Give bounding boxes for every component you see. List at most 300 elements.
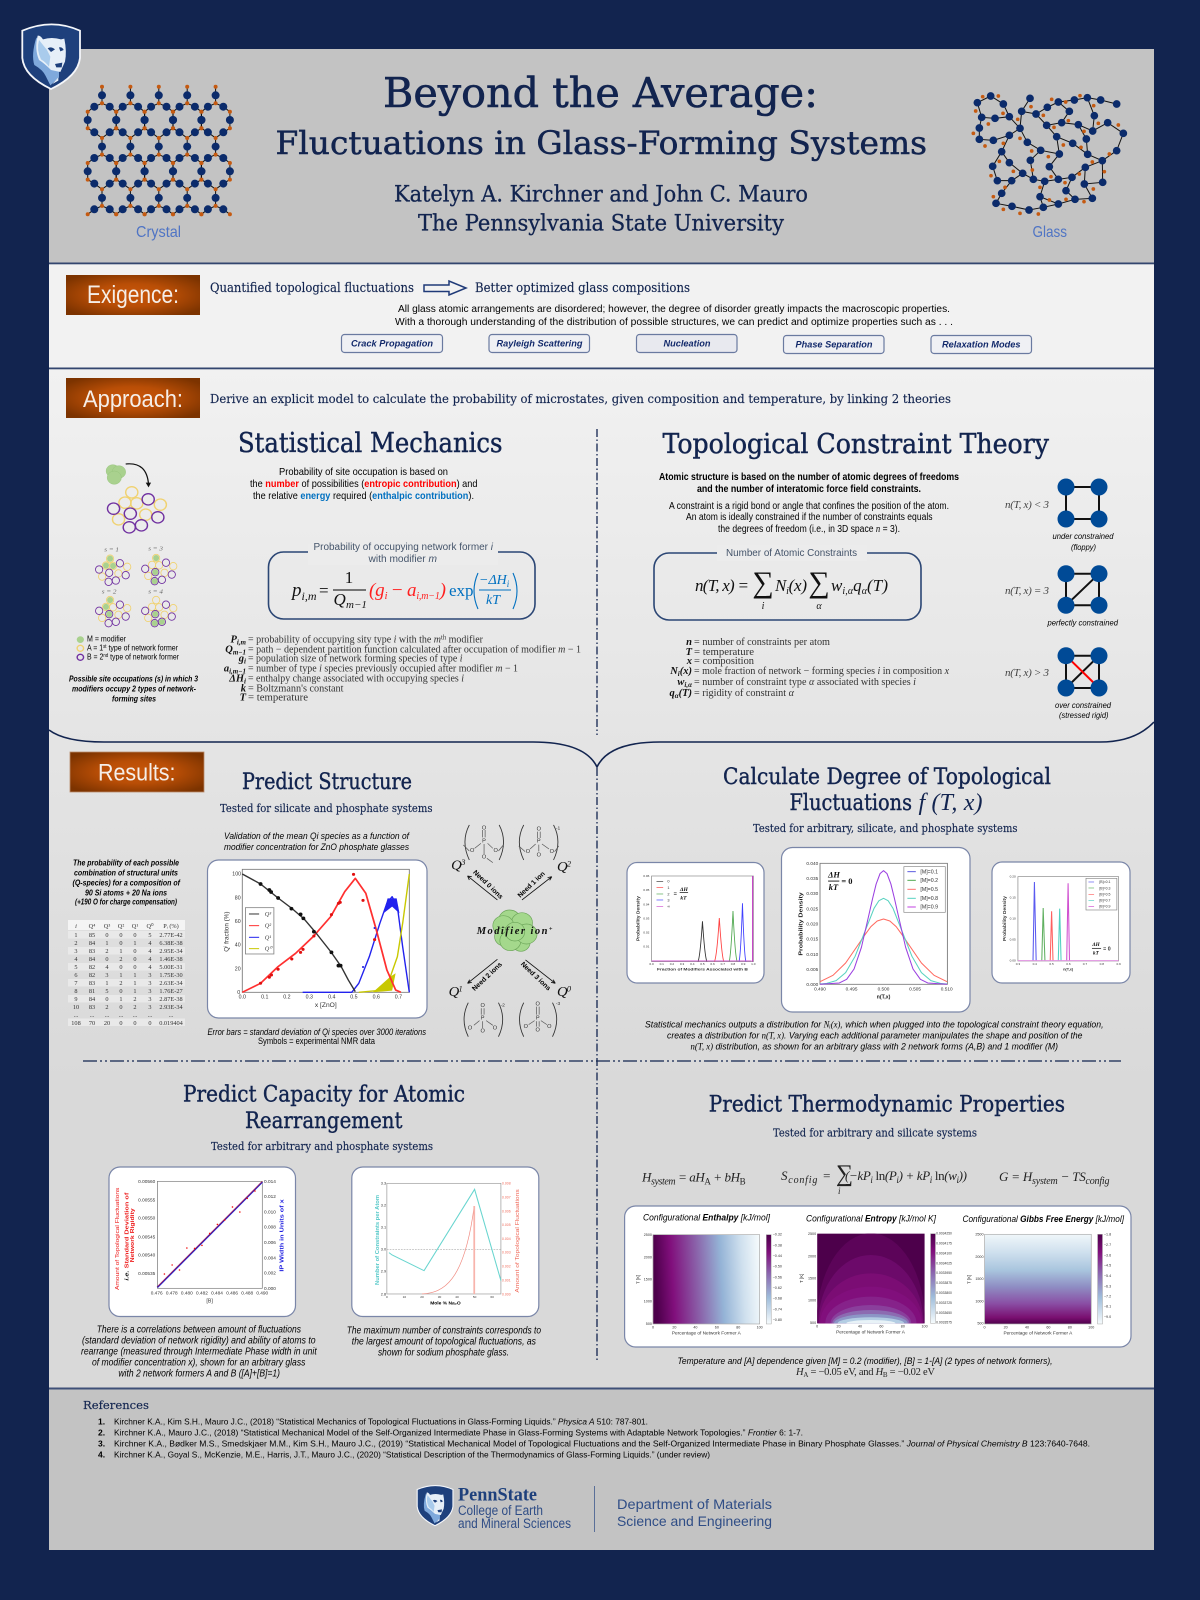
table: q-species probabilities: 10	[73, 1004, 79, 1011]
caption: correlation: of modifier concentration x), shown for an arbitrary glass	[92, 1358, 305, 1368]
chart: constraints vs Na2O: 0.003	[502, 1251, 511, 1255]
contour map: enthalpy: T [K]	[635, 1275, 640, 1284]
chart: fraction of modifiers: =	[674, 891, 677, 897]
table caption: 90 Si atoms + 20 Na ions	[85, 888, 167, 898]
equation: gibbs: G = H	[999, 1169, 1032, 1184]
contour map: enthalpy: 100	[757, 1325, 763, 1329]
table: q-species probabilities: 0	[133, 1020, 137, 1027]
chart: n(T,x) distribution: = 0	[841, 877, 853, 886]
equation: occupation probability: p	[290, 580, 302, 601]
table: q-species probabilities: 70	[89, 1020, 95, 1027]
icon: modifier atoms and arrow	[106, 464, 151, 487]
variable definitions: n	[686, 637, 692, 648]
fluctuation caption: creates a distribution for n(T, x). Varying each additional parameter manipulates the shape and position of the	[667, 1030, 1082, 1042]
table: q-species probabilities: 2	[133, 1004, 137, 1011]
table caption: combination of structural units	[74, 868, 178, 878]
variable definitions: (T)	[679, 688, 692, 699]
Q0 structure: -3	[556, 1001, 561, 1007]
chart caption top: Validation of the mean Qi species as a function of	[224, 831, 410, 842]
equation title: with modifier m	[367, 554, 437, 565]
equation: number of constraints: N	[775, 576, 786, 595]
table: q-species probabilities: 0	[105, 956, 109, 963]
chart: fluctuations vs IP width: 0.482	[196, 1291, 208, 1296]
chart: fraction of modifiers: Fraction of Modifiers Associated with B	[657, 967, 748, 972]
contour map: entropy	[800, 1232, 952, 1334]
chart: n(T,x) distribution: [M]=0.1	[920, 869, 938, 875]
table: q-species probabilities: 1	[105, 980, 109, 987]
panel: references and footer	[49, 1388, 1154, 1550]
table: q-species probabilities: 0	[119, 988, 123, 995]
table: q-species probabilities: 0	[133, 956, 137, 963]
diagram: perfectly constrained: perfectly constrained	[1047, 618, 1118, 628]
equation: occupation probability: a	[407, 580, 417, 601]
chart: fluctuations vs IP width: 0.006	[264, 1240, 276, 1245]
chart: composition spikes: [B]=0.9	[1099, 905, 1111, 909]
chart: fluctuations vs IP width: 0.00535	[138, 1271, 156, 1276]
chart: n(T,x) distribution: 0.040	[806, 861, 819, 866]
table: q-species probabilities: 2.93E-34	[159, 1004, 183, 1011]
chart: fluctuations vs IP width: 0.012	[264, 1194, 276, 1199]
chart: fraction of modifiers: ∞	[667, 905, 670, 909]
equation: entropy: i	[930, 1175, 933, 1185]
contour map: entropy: 2500	[808, 1232, 816, 1236]
chart: fluctuations vs IP width: 0.490	[256, 1291, 269, 1296]
chart caption top: modifier concentration for ZnO phosphate glasses	[224, 842, 409, 853]
table: q-species probabilities: 83	[89, 980, 95, 987]
Q0 structure: O	[524, 1024, 528, 1030]
equation: entropy: S	[781, 1168, 788, 1183]
equation: entropy: i	[870, 1175, 873, 1185]
equation: number of constraints: n(T, x) =	[695, 576, 749, 595]
table: q-species probabilities: 6	[74, 972, 78, 979]
chart: fraction of modifiers: 0.04	[643, 902, 650, 906]
variable definitions: (x)	[680, 666, 692, 677]
Q3 structure: 3	[460, 858, 465, 867]
chart: constraints vs Na2O: Number of Constraints per Atom	[375, 1195, 381, 1285]
occupation s=2	[95, 589, 131, 627]
contour map: gibbs free energy: −5.4	[1104, 1274, 1111, 1278]
line chart: Q species vs ZnO: 0.0	[239, 995, 246, 1001]
equation: entropy: =	[818, 1168, 831, 1183]
fluctuation caption	[645, 1020, 1104, 1052]
equation: occupation probability	[290, 568, 517, 611]
tag: phase separation: Phase Separation	[796, 340, 873, 350]
table: q-species probabilities: 0	[148, 1020, 152, 1027]
diagram: over constrained: n(T, x) > 3	[1005, 667, 1050, 679]
table: q-species probabilities: ...	[105, 1012, 110, 1019]
Q1 structure: Q	[449, 984, 460, 1000]
section dividers	[49, 429, 1154, 1362]
caption: thermodynamics: = −0.05 eV, and	[808, 1367, 876, 1378]
heading: results: Results:	[98, 760, 176, 786]
legend labels	[87, 634, 179, 662]
reference list	[98, 1416, 1090, 1460]
chart: fraction of modifiers: 0.4	[690, 962, 695, 966]
equation: entropy: ∑	[836, 1161, 853, 1187]
table: q-species probabilities: ...	[119, 1012, 124, 1019]
panel: statistical mechanics	[69, 428, 581, 704]
table: q-species probabilities: 3	[105, 972, 109, 979]
variable definitions: q	[669, 688, 675, 699]
description line 2: With a thorough understanding of the distribution of possible structures, we can predict and optimize properties such as . . .	[395, 317, 953, 328]
diagram: modifier ion and Q species	[449, 825, 571, 1037]
Q2 structure	[519, 825, 571, 875]
chart: n(T,x) distribution: 0.035	[806, 876, 819, 881]
panel: predict structure	[68, 770, 571, 1047]
line chart: Q species vs ZnO: 0.4	[328, 995, 336, 1001]
chart: fluctuations vs IP width: 0.010	[264, 1209, 276, 1214]
Q2 structure: -1	[556, 825, 561, 831]
institution: The Pennsylvania State University	[418, 212, 785, 236]
contour map: gibbs free energy: −9.0	[1104, 1315, 1111, 1319]
icon: modifier ion cluster	[493, 910, 537, 951]
chart: n(T,x) distribution: [M]=0.8	[920, 896, 938, 902]
variable definitions: = population size of network forming species of type i	[248, 654, 463, 664]
equation: number of constraints: w	[831, 576, 842, 595]
chart: fraction of modifiers: ΔH	[679, 887, 689, 893]
caption: site occupations	[69, 674, 198, 704]
Q0 structure: 0	[567, 985, 571, 994]
table: q-species probabilities: 0	[133, 964, 137, 971]
chart caption bottom	[208, 1027, 426, 1047]
Q3 structure	[451, 825, 504, 873]
variable definitions: i,m−1	[229, 668, 246, 676]
diagram: perfectly constrained: n(T, x) = 3	[1005, 585, 1050, 597]
arrow	[424, 281, 466, 295]
icon: network former rings	[107, 487, 166, 533]
Q0 structure: Q	[557, 984, 568, 1000]
chart: fraction of modifiers: 1	[667, 886, 670, 890]
line chart: Q species vs ZnO: 0.7	[395, 995, 402, 1001]
table: q-species probabilities: 5	[74, 964, 78, 971]
table: q-species probabilities: 3	[148, 988, 152, 995]
contour map: entropy: 1000	[808, 1299, 816, 1303]
label: modifier ion: +	[549, 927, 553, 933]
table: q-species probabilities: ...	[148, 1012, 153, 1019]
table: q-species probabilities: ...	[133, 1012, 138, 1019]
line chart: Q species vs ZnO: x [ZnO]	[315, 1002, 337, 1009]
equation: number of constraints: α	[816, 601, 822, 612]
table: q-species probabilities: 2.95E-34	[159, 948, 183, 955]
chart: constraints vs Na2O	[352, 1167, 539, 1316]
chart: constraints vs Na2O: 0.006	[502, 1209, 511, 1213]
caption: correlation: (standard deviation of network rigidity) and ability of atoms to	[82, 1336, 316, 1346]
table: q-species probabilities: 2	[133, 996, 137, 1003]
chart: composition spikes: 0.15	[1010, 895, 1016, 899]
contour map: enthalpy: −0.38	[773, 1243, 782, 1247]
Q3 structure: P	[482, 839, 486, 845]
title: Beyond the Average:	[383, 69, 818, 117]
variable definitions: w	[677, 677, 684, 688]
contour map: enthalpy: −0.62	[773, 1286, 782, 1290]
chart: fluctuations vs IP width: 0.480	[181, 1291, 193, 1296]
chart: fraction of modifiers: 1.0	[751, 962, 756, 966]
chart: fluctuations vs IP width: 0.478	[166, 1291, 178, 1296]
occupation s=1: s = 1	[104, 547, 119, 554]
equation: enthalpy: A	[704, 1176, 711, 1186]
chart: composition spikes: 0.00	[1010, 958, 1016, 962]
Q2 structure: O	[526, 849, 530, 855]
equation: occupation probability: m−1	[346, 599, 367, 611]
table: q-species probabilities: Q²	[118, 923, 124, 930]
equation: gibbs: config	[1086, 1176, 1110, 1187]
diagram: under constrained	[1005, 478, 1114, 552]
contour map: enthalpy: 0	[652, 1325, 654, 1329]
line chart: Q species vs ZnO: 80	[235, 895, 241, 901]
legend labels: A = 1	[87, 644, 105, 652]
equation: entropy: (P	[885, 1168, 897, 1183]
table: q-species probabilities: 84	[89, 956, 96, 963]
subheading: Tested for arbitrary, silicate, and phosphate systems	[753, 821, 1018, 835]
variable definitions: modifier	[446, 634, 483, 646]
line chart: Q species vs ZnO: Q²	[265, 923, 271, 930]
chart: composition spikes: [B]=0.5	[1099, 892, 1111, 896]
table: q-species probabilities: 82	[89, 972, 95, 979]
constraint theory description: An atom is ideally constrained if the number of constraints equals	[686, 512, 932, 523]
reference list: Kirchner K.A., Goyal S., McKenzie, M.E., Harris, J.T., Mauro J.C., (2020) “Statistical Description of the Thermodynamics of Glass-Forming Liquids.” (under review)	[114, 1450, 710, 1460]
table caption: (Q-species) for a composition of	[72, 878, 181, 888]
Q1 structure: P	[481, 1015, 485, 1021]
panel: exigence	[49, 262, 1154, 369]
heading: calculate degree	[723, 764, 1051, 816]
contour map: enthalpy: 1500	[644, 1277, 652, 1281]
line chart: Q species vs ZnO	[208, 860, 427, 1018]
Q0 structure: O	[536, 1001, 540, 1007]
table: q-species probabilities: 0	[133, 932, 137, 939]
chart: n(T,x) distribution: 0.015	[806, 937, 819, 942]
chart: constraints vs Na2O: 3.0	[381, 1248, 386, 1252]
icon: Penn State shield	[22, 24, 80, 89]
chart: constraints vs Na2O: 0	[386, 1295, 388, 1299]
equation: enthalpy: H	[642, 1170, 651, 1184]
heading: references: References	[83, 1398, 149, 1412]
arrow: need 1 ion: Need 1 ion	[517, 871, 547, 899]
fluctuation caption: n(T, x) distribution, as shown for an arbitrary glass with 2 network forms (A,B) and 1 modifier (M)	[690, 1042, 1058, 1052]
table: q-species probabilities: ...	[74, 1012, 79, 1019]
statistical mechanics description: Probability of site occupation is based on	[279, 466, 448, 478]
contour map: entropy: 20	[837, 1324, 841, 1328]
reference list: Kirchner K.A., Mauro J.C., (2018) “Statistical Mechanical Model of the Self-Organized Intermediate Phase in Glass-Forming Systems with Adaptable Network Topologies.” Frontier 6: 1-7.	[114, 1428, 803, 1438]
chart: composition spikes: [B]=0.7	[1099, 899, 1111, 903]
legend labels: M = modifier	[87, 634, 126, 644]
contour map: gibbs free energy: 500	[977, 1322, 984, 1326]
contour map: gibbs free energy: 0	[984, 1325, 986, 1329]
chart: fraction of modifiers: 0.6	[710, 962, 715, 966]
chart: fluctuations vs IP width: i.e. Standard Deviation of	[124, 1192, 130, 1281]
table: q-species probabilities: 2	[74, 940, 78, 947]
description line 1: All glass atomic arrangements are disordered; however, the degree of disorder greatly impacts the macroscopic properties.	[398, 304, 950, 315]
table: q-species probabilities: 3	[148, 996, 152, 1003]
occupation s=3	[142, 546, 177, 585]
contour map: entropy: 0.0033875	[936, 1281, 952, 1285]
diagram: perfectly constrained	[1005, 565, 1118, 628]
Q0 structure: O	[536, 1027, 540, 1033]
table: q-species probabilities: 1.46E-38	[159, 956, 183, 963]
panel: atomic rearrangement	[81, 1082, 541, 1380]
crystal label: Crystal	[136, 224, 181, 241]
heading: predict thermodynamic properties: Predict Thermodynamic Properties	[709, 1092, 1065, 1118]
chart: fluctuations vs IP width: 0.008	[264, 1225, 276, 1230]
logo: Penn State college: PennState	[458, 1484, 537, 1506]
heading: calculate degree: Calculate Degree of Topological	[723, 764, 1051, 790]
contour map: enthalpy: 40	[693, 1325, 697, 1329]
Q1 structure: O	[480, 1029, 485, 1035]
contour map: enthalpy: 1000	[644, 1300, 652, 1304]
variable definitions: α	[675, 692, 679, 700]
caption: thermodynamics	[678, 1356, 1052, 1379]
heading: results	[70, 752, 204, 792]
variable definitions: i	[244, 658, 246, 666]
contour map: entropy: 0.0033725	[936, 1301, 952, 1305]
chart: constraints vs Na2O: 60	[490, 1295, 494, 1299]
chart: composition spikes: 0.6	[1066, 962, 1071, 966]
contour map: gibbs free energy: −2.7	[1104, 1243, 1111, 1247]
caption: thermodynamics: B	[883, 1371, 888, 1379]
logo: Penn State college: and Mineral Sciences	[458, 1516, 571, 1531]
tag: nucleation: Nucleation	[664, 338, 711, 350]
line chart: Q species vs ZnO: 0.3	[306, 995, 313, 1001]
chart: fraction of modifiers: 0.0	[649, 962, 654, 966]
chart: composition spikes: 0.9	[1116, 962, 1121, 966]
subtitle: Fluctuations in Glass-Forming Systems	[276, 124, 927, 162]
variable definitions: = temperature	[248, 692, 308, 704]
Q1 structure	[449, 984, 505, 1037]
chart: constraints vs Na2O: 30	[438, 1295, 442, 1299]
chart: n(T,x) distribution: 0.505	[909, 987, 921, 992]
equation: occupation probability: Q	[334, 590, 346, 609]
table: q-species probabilities: 3	[148, 972, 152, 979]
equation: entropy	[781, 1161, 967, 1196]
chart: fraction of modifiers: 0	[667, 880, 670, 884]
variable definitions: = mole fraction of network − forming species i in composition x	[694, 666, 949, 677]
chart: fluctuations vs IP width: 0.00550	[138, 1216, 156, 1221]
caption: maximum constraints: the largest amount of topological fluctuations, as	[352, 1336, 536, 1348]
chart: n(T,x) distribution: [M]=0.5	[920, 887, 938, 893]
fluctuation caption: Statistical mechanics outputs a distribution for Nᵢ(x), which when plugged into the topological constraint theory equation,	[645, 1020, 1104, 1030]
contour map: gibbs free energy: 1000	[975, 1299, 984, 1303]
legend dots	[77, 636, 84, 660]
table: q-species probabilities: 7	[74, 980, 78, 987]
table: q-species probabilities: 1	[133, 988, 137, 995]
table: q-species probabilities: 0	[133, 948, 137, 955]
contour map: entropy: 0.0033800	[936, 1291, 952, 1295]
chart: composition spikes: Probability Density	[1002, 895, 1007, 941]
table caption	[72, 858, 181, 906]
variable definitions: a	[224, 664, 229, 674]
caption: thermodynamics: A	[803, 1371, 808, 1379]
contour map: entropy: 80	[901, 1324, 905, 1328]
chart: constraints vs Na2O: Mole % Na₂O	[430, 1301, 461, 1307]
contour map: enthalpy: −0.56	[773, 1275, 782, 1279]
table: q-species probabilities: 81	[89, 988, 95, 995]
chart caption bottom: Symbols = experimental NMR data	[258, 1036, 376, 1047]
contour map: enthalpy: 2000	[644, 1255, 652, 1259]
diagram: under constrained: n(T, x) < 3	[1005, 499, 1050, 511]
variable definitions: P	[230, 634, 237, 646]
chart: fluctuations vs IP width: Network Rigidity	[130, 1207, 136, 1262]
Q1 structure: -2	[500, 1003, 505, 1009]
Q2 structure: O	[537, 852, 541, 858]
chart: n(T,x) distribution: 0.000	[806, 982, 819, 987]
contour map: gibbs free energy: −7.2	[1104, 1295, 1111, 1299]
table: q-species probabilities: Pᵢ (%)	[163, 923, 179, 930]
Q1 structure: O	[493, 1025, 497, 1031]
variable definitions: = path − dependent partition function calculated after occupation of modifier m − 1	[248, 644, 581, 656]
occupation s=4: s = 4	[148, 589, 163, 596]
chart: composition spikes: ΔH	[1091, 942, 1101, 948]
equation: occupation probability: −	[387, 580, 407, 601]
equation title	[314, 542, 494, 565]
chart: composition spikes: [B]=0.3	[1099, 886, 1111, 890]
reference list: Kirchner K.A., Kim S.H., Mauro J.C., (2018) “Statistical Mechanics of Topological Fluctuations in Glass-Forming Liquids.” Physica A 510: 787-801.	[114, 1416, 648, 1426]
variable definitions: i,m	[237, 638, 247, 646]
chart: fluctuations vs IP width: 0.000	[264, 1286, 276, 1291]
contour map: gibbs free energy: −8.1	[1104, 1305, 1111, 1309]
contour map: entropy: T [K]	[799, 1274, 804, 1283]
table: q-species probabilities: 0	[119, 964, 123, 971]
heading: exigence: Exigence:	[87, 281, 179, 309]
equation: entropy: ))	[958, 1168, 967, 1183]
table: q-species probabilities: 83	[89, 1004, 95, 1011]
chart: fraction of modifiers: 2	[667, 892, 670, 896]
line chart: Q species vs ZnO: 0.2	[283, 995, 291, 1001]
equation: occupation probability: i	[507, 579, 510, 589]
variable definitions: i,α	[684, 681, 692, 689]
equation: enthalpy: + bH	[710, 1170, 741, 1184]
chart: n(T,x) distribution: [M]=0.2	[920, 878, 938, 884]
arrow: need 2 ions: Need 2 ions	[471, 961, 504, 993]
Q2 structure: O	[537, 826, 541, 832]
reference list: 3.	[98, 1438, 105, 1448]
line chart: Q species vs ZnO: Q⁰	[265, 946, 273, 953]
variable definitions: = composition	[694, 656, 755, 667]
occupation s=2: s = 2	[102, 589, 117, 596]
table: q-species probabilities: 3	[148, 980, 152, 987]
tag: crack propagation	[342, 334, 442, 352]
chart: fluctuations vs IP width: 0.486	[226, 1291, 238, 1296]
equation: number of constraints: i,α	[842, 586, 854, 597]
table: q-species probabilities: 84	[89, 996, 96, 1003]
chart: fluctuations vs IP width: 0.484	[211, 1291, 223, 1296]
chart: n(T,x) distribution: 0.490	[814, 987, 826, 992]
equation box: probability	[268, 542, 535, 619]
Q1 structure: O	[468, 1025, 472, 1031]
tag: phase separation	[784, 336, 884, 354]
table: q-species probabilities: 0	[119, 932, 123, 939]
table: q-species probabilities: Q⁰	[146, 923, 154, 930]
chart: fraction of modifiers	[627, 862, 764, 983]
equation: number of constraints	[695, 566, 888, 612]
contour map: gibbs free energy: −6.3	[1104, 1284, 1111, 1288]
line chart: Q species vs ZnO: Q¹	[265, 934, 271, 941]
chart: composition spikes: 0.5	[1049, 962, 1054, 966]
chart: fluctuations vs IP width: 0.00545	[138, 1234, 156, 1239]
caption: thermodynamics: Temperature and [A] dependence given [M] = 0.2 (modifier), [B] = 1-[A] (2 types of network formers),	[678, 1356, 1052, 1367]
equation: number of constraints: i	[762, 601, 765, 612]
panel: approach and results body	[49, 368, 1154, 1388]
table: q-species probabilities: 0	[119, 940, 123, 947]
caption: correlation: rearrange (measured through Intermediate Phase width in unit	[81, 1346, 318, 1358]
chart: fraction of modifiers: 0.9	[741, 962, 746, 966]
chart: fraction of modifiers: 0.5	[700, 962, 705, 966]
chart: fraction of modifiers: 0.03	[643, 916, 650, 920]
table: q-species probabilities: 20	[104, 1020, 110, 1027]
variable definitions: th	[441, 634, 447, 642]
equation: number of constraints: (T)	[867, 576, 888, 595]
heading: statistical mechanics: Statistical Mechanics	[238, 428, 502, 459]
chart: constraints vs Na2O: 10	[403, 1295, 406, 1299]
equation: occupation probability: 1	[345, 568, 353, 587]
